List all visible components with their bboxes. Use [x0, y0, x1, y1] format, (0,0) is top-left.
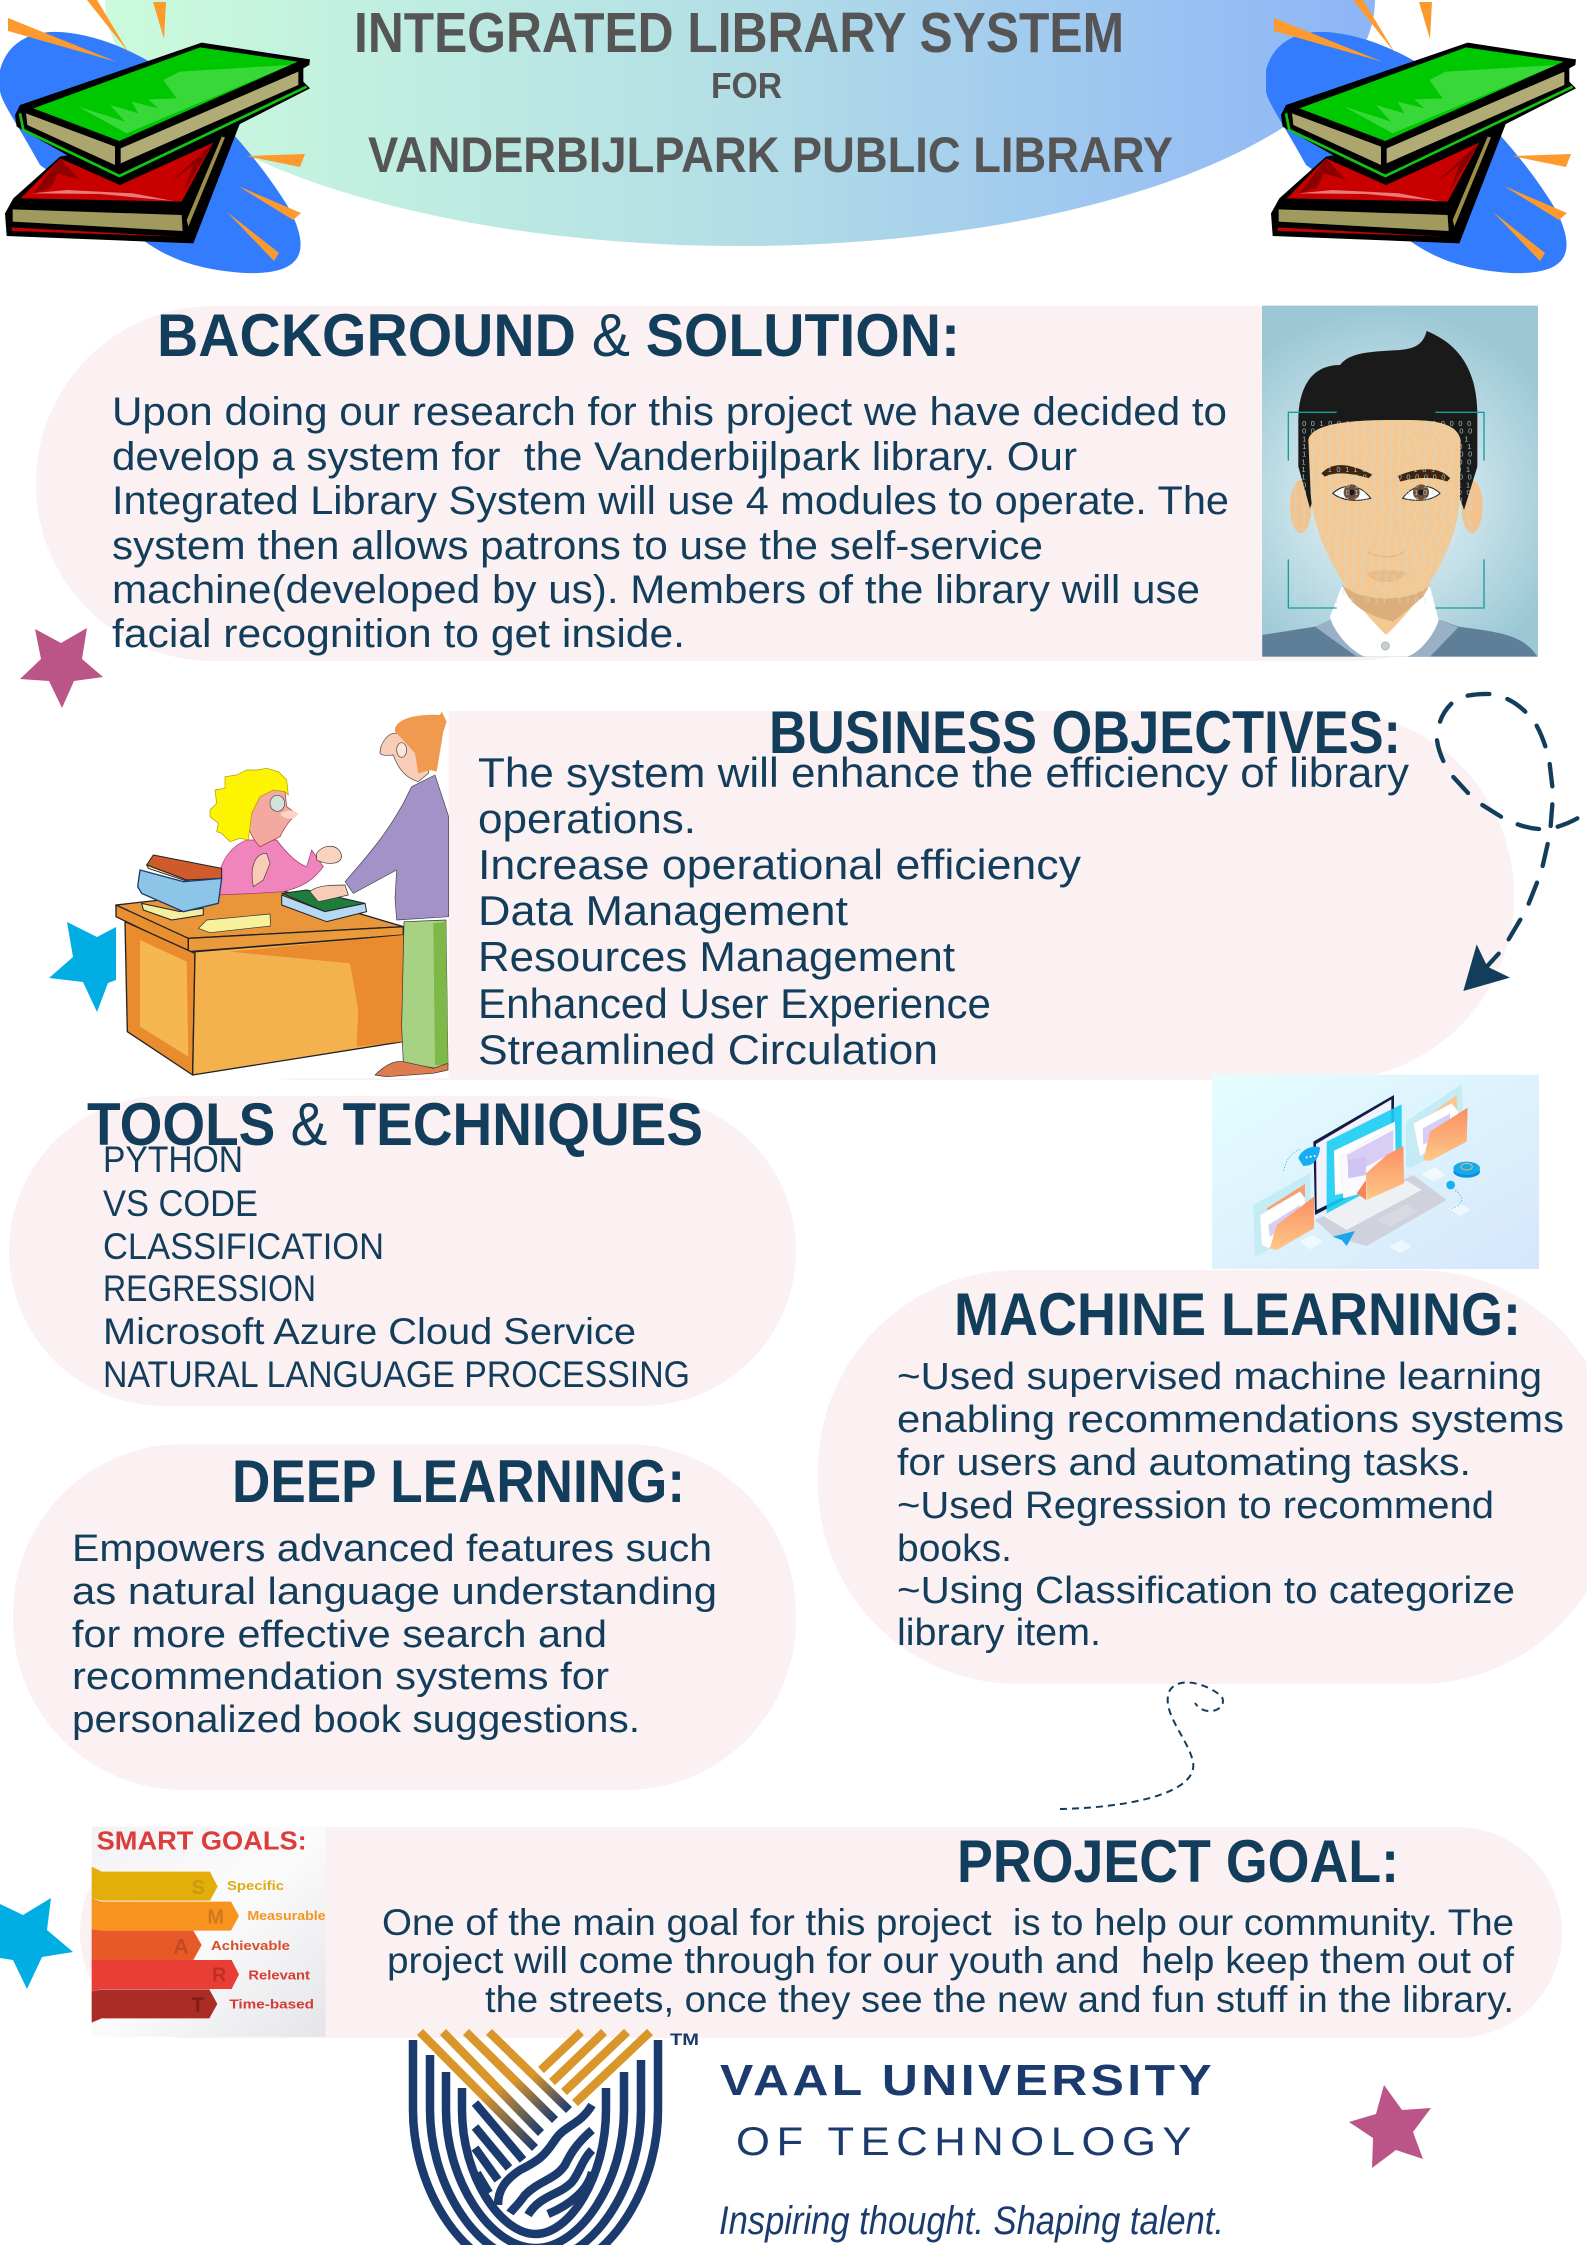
text: machine learning body: library item.: [897, 1612, 1101, 1654]
image: facial recognition portrait: 100000010000001000000: [1293, 427, 1477, 436]
image: facial recognition portrait: 110000000000000000000: [1293, 473, 1476, 482]
logo: VUT emblem: [413, 2032, 658, 2245]
text: machine learning body: for users and automating tasks.: [897, 1442, 1471, 1484]
text: background body: [112, 390, 1229, 656]
text: deep learning body: recommendation systems for: [72, 1656, 609, 1698]
text: business objectives list: Streamlined Circulation: [478, 1026, 938, 1073]
image: facial recognition portrait: 100001010100000010000: [1293, 503, 1477, 512]
image: facial recognition portrait: 0 11111 0 110 01111: [1293, 588, 1447, 597]
image: SMART goals chart: Relevant: [248, 1968, 311, 1982]
text: machine learning body: ~Used supervised machine learning: [897, 1356, 1542, 1398]
image: facial recognition portrait: 011100101000111110011: [1293, 434, 1473, 443]
panel: machine learning: [818, 1270, 1587, 1684]
panel: tools and techniques: [9, 1091, 796, 1406]
decoration: dashed squiggle: [1060, 1682, 1223, 1809]
header gradient ellipse: [105, 0, 1375, 246]
text: background body: system then allows patrons to use the self-service: [112, 524, 1043, 568]
image: facial recognition portrait: 1 1101 1 011 1101: [1293, 595, 1432, 604]
text: tools list: REGRESSION: [103, 1268, 316, 1309]
logo text: Vaal University of Technology: OF TECHNOLOGY: [736, 2120, 1198, 2164]
image: SMART goals chart: Specific: [227, 1879, 284, 1893]
title: [354, 1, 1173, 183]
image: facial recognition portrait: 110010110011101010001: [1293, 465, 1475, 474]
image: facial recognition portrait: 1 01100001011000000111: [1293, 557, 1481, 566]
text: machine learning body: enabling recommendations systems: [897, 1399, 1564, 1441]
title: INTEGRATED LIBRARY SYSTEM: [354, 1, 1124, 65]
logo text: Vaal University of Technology: TM: [670, 2030, 699, 2049]
panel: project goal: [80, 1827, 1562, 2038]
image: facial recognition portrait: 010010101010101000000: [1293, 519, 1477, 528]
arrow: dashed loop: [1437, 694, 1577, 991]
arrowhead: [1463, 944, 1510, 991]
panel: business objectives: [116, 699, 1514, 1080]
text: tools list: Microsoft Azure Cloud Service: [103, 1311, 636, 1352]
logo text: Vaal University of Technology: [670, 2030, 1224, 2243]
heading: background and solution: BACKGROUND & SOLUTION:: [157, 302, 960, 369]
heading: machine learning: MACHINE LEARNING:: [954, 1281, 1521, 1348]
text: project goal body: One of the main goal for this project is to help our community. The: [382, 1902, 1514, 1943]
woman: blouse: [217, 840, 323, 895]
image: facial recognition portrait: 1 01101111011010101010: [1293, 542, 1481, 551]
title: VANDERBIJLPARK PUBLIC LIBRARY: [368, 127, 1173, 183]
image: facial recognition portrait: 1 1010110110000111 011: [1293, 565, 1479, 574]
image: laptop with folders: [1212, 1075, 1539, 1269]
text: deep learning body: personalized book suggestions.: [72, 1699, 640, 1741]
text: tools list: VS CODE: [103, 1183, 258, 1224]
image: facial recognition portrait: 000110001101011010100: [1293, 526, 1475, 535]
books on desk: [147, 855, 222, 880]
logo text: Vaal University of Technology: VAAL UNIVERSITY: [720, 2056, 1215, 2105]
heading: deep learning: DEEP LEARNING:: [232, 1448, 685, 1515]
text: tools list: [103, 1139, 690, 1395]
text: machine learning body: books.: [897, 1528, 1012, 1570]
text: background body: develop a system for the Vanderbijlpark library. Our: [112, 435, 1077, 479]
image: SMART goals chart: Measurable: [247, 1909, 326, 1923]
text: machine learning body: [897, 1356, 1564, 1654]
text: business objectives list: [478, 749, 1409, 1073]
image: facial recognition portrait: 100000011110001000000: [1293, 488, 1475, 497]
text: background body: machine(developed by us). Members of the library will use: [112, 568, 1200, 612]
text: deep learning body: Empowers advanced features such: [72, 1528, 712, 1570]
text: tools list: CLASSIFICATION: [103, 1226, 384, 1267]
text: project goal body: [382, 1902, 1515, 2020]
image: facial recognition portrait: 110000011000101000000: [1293, 457, 1476, 466]
text: tools list: PYTHON: [103, 1139, 243, 1180]
image: facial recognition portrait: [1262, 306, 1538, 657]
image: facial recognition portrait: 100100111001001000000: [1293, 419, 1476, 428]
heading: business objectives: BUSINESS OBJECTIVES:: [769, 699, 1401, 766]
decoration: blue star lower left: [0, 1898, 73, 1989]
image: facial recognition portrait: 1 11001110111101010101: [1293, 534, 1480, 543]
decoration: pink star upper left: [20, 628, 103, 708]
text: business objectives list: The system will enhance the efficiency of library: [478, 749, 1409, 796]
text: background body: Integrated Library System will use 4 modules to operate. The: [112, 479, 1229, 523]
text: deep learning body: [72, 1528, 717, 1741]
heading: tools and techniques: TOOLS & TECHNIQUES: [87, 1091, 703, 1158]
image: facial recognition portrait: 001000110000110000000: [1293, 496, 1476, 505]
text: project goal body: the streets, once they see the new and fun stuff in the library.: [485, 1979, 1514, 2020]
panel: deep learning: [13, 1444, 796, 1790]
text: business objectives list: Resources Management: [478, 933, 955, 980]
logo text: Vaal University of Technology: Inspiring thought. Shaping talent.: [719, 2199, 1224, 2243]
heading: project goal: PROJECT GOAL:: [957, 1828, 1399, 1895]
text: background body: Upon doing our research for this project we have decided to: [112, 390, 1227, 434]
text: machine learning body: ~Using Classification to categorize: [897, 1570, 1515, 1612]
text: business objectives list: operations.: [478, 795, 696, 842]
image: SMART goals chart: M: [207, 1906, 224, 1928]
decoration: blue star left of desk: [49, 922, 116, 1012]
image: SMART goals chart: T: [192, 1995, 204, 2017]
image: facial recognition portrait: 0 1110100 0111 110: [1293, 572, 1442, 581]
image: librarian at desk: [116, 710, 449, 1078]
text: background body: facial recognition to get inside.: [112, 612, 685, 656]
image: facial recognition portrait: 100100011001100110011: [1293, 480, 1475, 489]
title: FOR: [711, 65, 782, 106]
image: SMART goals chart: SMART GOALS:: [97, 1825, 307, 1855]
decoration: pink star lower right: [1349, 2085, 1431, 2168]
image: SMART goals chart: R: [212, 1965, 227, 1987]
image: facial recognition portrait: 010001000011100100001: [1293, 442, 1476, 451]
image: facial recognition portrait: 0 00101001100000100010: [1293, 549, 1483, 558]
image: facial recognition portrait: 1 1101010 10 111 01: [1293, 580, 1450, 589]
text: deep learning body: for more effective search and: [72, 1614, 607, 1656]
text: machine learning body: ~Used Regression to recommend: [897, 1485, 1494, 1527]
text: business objectives list: Enhanced User Experience: [478, 980, 991, 1027]
image: SMART goals chart: Time-based: [229, 1998, 314, 2012]
text: tools list: NATURAL LANGUAGE PROCESSING: [103, 1354, 690, 1395]
text: business objectives list: Increase operational efficiency: [478, 841, 1081, 888]
image: facial recognition portrait: 010000000000100100000: [1293, 450, 1477, 459]
panel: background and solution: [36, 302, 1530, 661]
image: SMART goals chart: S: [192, 1877, 205, 1899]
man: [402, 920, 448, 1068]
image: SMART goals chart: [92, 1825, 326, 2037]
text: project goal body: project will come through for our youth and help keep them out of: [387, 1940, 1515, 1981]
image: SMART goals chart: Achievable: [211, 1939, 290, 1953]
image: facial recognition portrait: 010100110111011010101: [1293, 511, 1475, 520]
icon: books right: [1266, 0, 1576, 273]
icon: books left: [0, 0, 310, 273]
text: deep learning body: as natural language understanding: [72, 1571, 717, 1613]
text: business objectives list: Data Management: [478, 887, 848, 934]
image: SMART goals chart: A: [173, 1934, 189, 1958]
